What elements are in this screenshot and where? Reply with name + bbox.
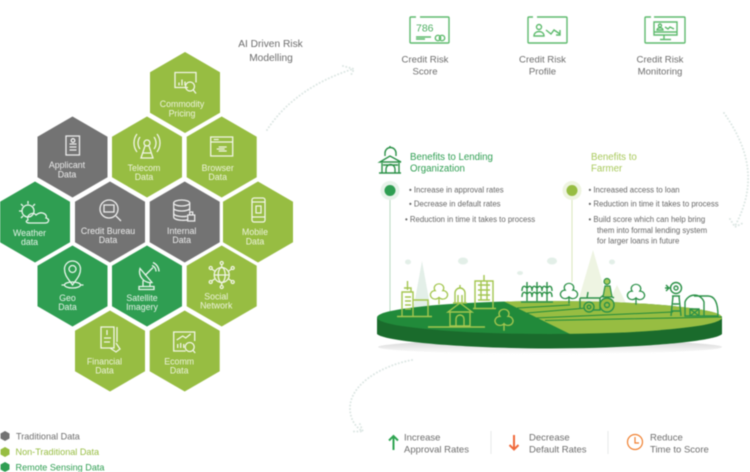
- hexagon: Ecomm Data: [150, 310, 220, 392]
- hexagon: Satellite Imagery: [112, 246, 182, 326]
- second tree: [627, 284, 645, 305]
- hexagon: Commodity Pricing: [150, 52, 220, 133]
- footer metric: decrease default rates: [510, 432, 587, 456]
- hexagon: Browser Data: [187, 116, 257, 198]
- output: Credit Risk Profile: [519, 17, 567, 78]
- output: Credit Risk Score: 786: [416, 22, 434, 34]
- legend: Traditional Data: Traditional Data: [16, 432, 81, 442]
- panel: benefits to lending organization: [379, 146, 535, 311]
- footer metric: reduce time to score: Reduce: [650, 432, 683, 444]
- footer metric: increase approval rates: [389, 432, 469, 456]
- legend: Non-Traditional Data: Non-Traditional Data: [16, 447, 100, 457]
- bullet list: • Increase in approval rates: [409, 186, 504, 194]
- hexagon: Weather data: data: [21, 237, 38, 247]
- hexagon: Commodity Pricing: Pricing: [169, 108, 196, 118]
- hexagon: Credit Bureau Data: Data: [99, 235, 117, 245]
- hexagon: Satellite Imagery: Satellite: [126, 293, 158, 303]
- panel: benefits to farmer: [562, 152, 719, 282]
- hexagon: Telecom Data: [112, 116, 182, 198]
- hexagon: Financial Data: Financial: [87, 356, 122, 366]
- icon: clock: [628, 434, 642, 450]
- bullet list: • Decrease in default rates: [409, 200, 501, 208]
- bullet list: them into formal lending system: [597, 226, 707, 235]
- bullet list: • Increased access to loan: [588, 186, 680, 194]
- hexagon: Weather data: [0, 182, 70, 262]
- icon: telecom tower: [134, 134, 160, 158]
- heading: AI Driven Risk Modelling: [238, 39, 304, 64]
- icon: applicant form: [66, 136, 80, 155]
- arrow: dotted bottom arc: [350, 360, 412, 432]
- hexagon: Mobile Data: Mobile: [242, 227, 268, 237]
- hexagon: Weather data: Weather: [13, 228, 46, 238]
- icon: network globe: [209, 262, 234, 288]
- output: Credit Risk Score: [402, 17, 449, 78]
- tree and tractor: [560, 283, 614, 312]
- hexagon: Financial Data: Data: [95, 366, 114, 376]
- hexagon: Ecomm Data: Data: [170, 366, 189, 376]
- hexagon: Internal Data: Data: [172, 235, 191, 245]
- icon: sun and cloud: [19, 201, 49, 223]
- bullet list: • Build score which can help bring: [588, 215, 705, 224]
- output: Credit Risk Profile: Profile: [529, 66, 556, 78]
- bullet list: • Reduction in time it takes to process: [588, 200, 719, 208]
- hexagon: Social Network: Social: [204, 292, 228, 302]
- green tree: [495, 309, 513, 331]
- icon: credit report magnifier: [100, 200, 121, 221]
- icon: database with lock: [174, 200, 195, 221]
- bullet list: for larger loans in future: [597, 236, 679, 246]
- bullet list: [588, 186, 719, 246]
- hexagon: Geo Data: [38, 246, 108, 326]
- background trees and clouds: [405, 250, 626, 316]
- hexagon: Financial Data: [75, 310, 145, 392]
- heading: Benefits to Farmer: Benefits to: [591, 152, 637, 163]
- legend: [0, 431, 105, 472]
- footer metric: reduce time to score: [628, 432, 709, 456]
- crops: [521, 282, 553, 302]
- hexagon: Ecomm Data: Ecomm: [164, 356, 194, 366]
- hexagon: Telecom Data: Telecom: [128, 163, 160, 173]
- hexagon: Credit Bureau Data: [75, 182, 145, 262]
- windmill: [665, 282, 682, 316]
- icon: up arrow: [389, 436, 398, 450]
- farm field: [504, 300, 722, 334]
- hexagon: Commodity Pricing: Commodity: [160, 99, 205, 109]
- hexagon: Browser Data: Browser: [202, 163, 234, 173]
- footer metric: reduce time to score: Time to Score: [650, 444, 709, 456]
- footer metric: increase approval rates: Approval Rates: [404, 444, 469, 456]
- heading: AI Driven Risk Modelling: Modelling: [249, 53, 293, 64]
- hexagon: Credit Bureau Data: Credit Bureau: [81, 226, 135, 236]
- hexagon: Applicant Data: Applicant: [49, 160, 86, 170]
- hexagon: Satellite Imagery: Imagery: [126, 302, 158, 312]
- icon: satellite dish: [139, 262, 159, 290]
- bullet list: [405, 186, 535, 224]
- hexagon: Applicant Data: Data: [58, 170, 76, 180]
- hexagon: Geo Data: Geo: [59, 293, 76, 303]
- output: Credit Risk Profile: Credit Risk: [519, 54, 566, 66]
- marker: green timeline dot: [380, 181, 400, 311]
- icon: browser window: [211, 137, 233, 156]
- icon: map pin: [62, 261, 84, 288]
- icon: down arrow: [510, 435, 518, 450]
- icon: mobile phone: [252, 198, 265, 222]
- farmer: [603, 278, 612, 297]
- hexagon: Mobile Data: [223, 182, 293, 262]
- heading: Benefits to Lending Organization: Benefits to Lending: [410, 152, 493, 163]
- icon: commodity chart: [175, 72, 196, 94]
- hexagon: Telecom Data: Data: [135, 172, 153, 182]
- heading: Benefits to Farmer: [591, 152, 637, 174]
- hexagon: Applicant Data: [38, 116, 108, 198]
- heading: Benefits to Farmer: Farmer: [591, 164, 623, 174]
- heading: Benefits to Lending Organization: Organization: [410, 164, 465, 174]
- marker: light green timeline dot: [562, 181, 582, 282]
- illustration: landscape on platform: [377, 250, 730, 354]
- output: Credit Risk Monitoring: Monitoring: [638, 66, 682, 78]
- footer metric: increase approval rates: Increase: [404, 432, 440, 444]
- icon: bank building: [379, 146, 401, 173]
- platform top: [377, 301, 722, 334]
- output: Credit Risk Monitoring: Credit Risk: [637, 54, 684, 66]
- output: Credit Risk Monitoring: [637, 17, 685, 78]
- hexagon: Browser Data: Data: [208, 172, 227, 182]
- output: Credit Risk Score: Score: [412, 66, 438, 78]
- platform shadow: [378, 340, 722, 354]
- hexagon: Internal Data: Internal: [167, 226, 196, 236]
- footer metric: decrease default rates: Decrease: [529, 432, 570, 444]
- hexagon: Mobile Data: Data: [246, 236, 264, 246]
- platform side: [377, 318, 722, 348]
- barn: [685, 295, 718, 316]
- arrow: dotted right arc: [724, 113, 748, 227]
- heading: AI Driven Risk Modelling: AI Driven Risk: [238, 39, 304, 50]
- icon: ecommerce chart: [174, 332, 195, 353]
- hexagon: Social Network: [187, 246, 257, 326]
- bank on platform: [428, 303, 485, 327]
- hexagon: Geo Data: Data: [58, 302, 77, 312]
- arrow: dotted to outputs: [267, 66, 354, 130]
- hexagon: Social Network: Network: [200, 300, 233, 310]
- output: Credit Risk Score: Credit Risk: [402, 54, 449, 66]
- footer metric: decrease default rates: Default Rates: [529, 444, 587, 456]
- heading: Benefits to Lending Organization: [410, 152, 493, 174]
- city buildings: [397, 275, 496, 316]
- field furrows: [517, 305, 722, 320]
- bullet list: • Reduction in time it takes to process: [405, 215, 535, 224]
- icon: financial document: [101, 327, 120, 352]
- hexagon: Internal Data: [150, 182, 220, 262]
